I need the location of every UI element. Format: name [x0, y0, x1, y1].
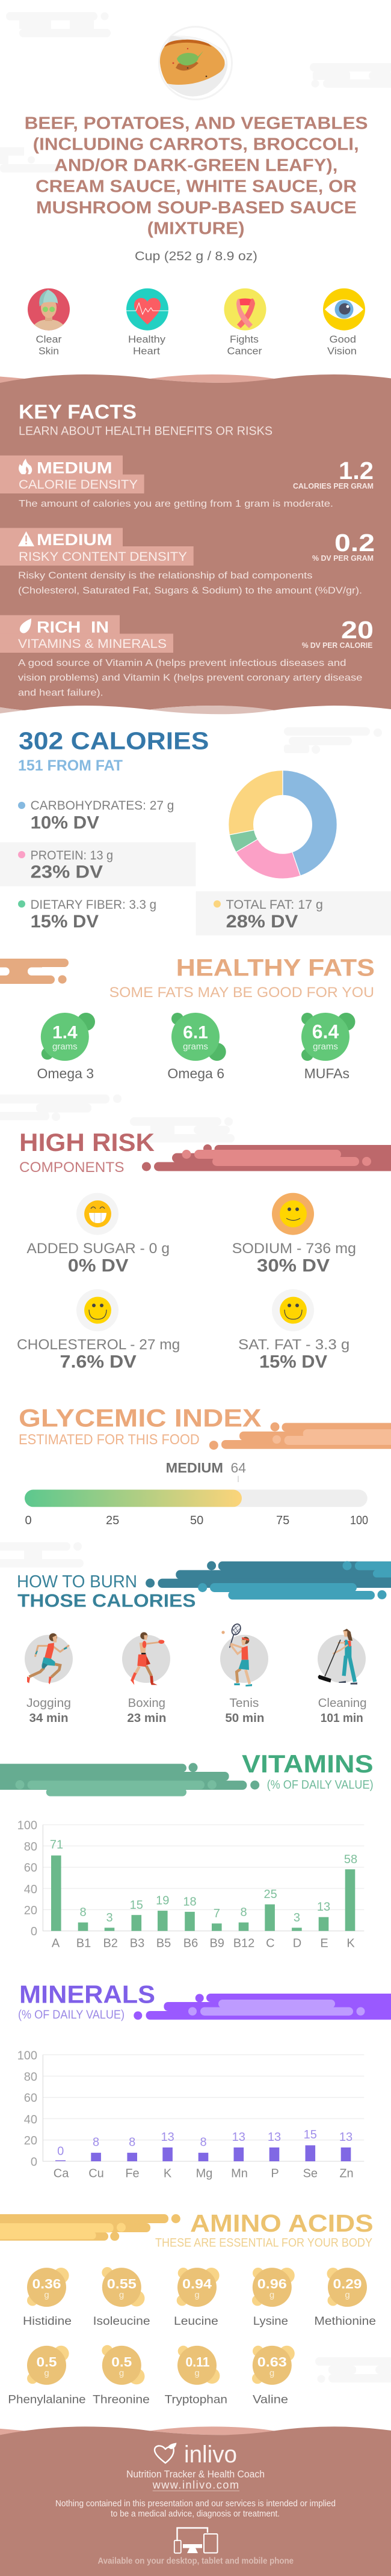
- glycemic scale: [25, 1514, 368, 1527]
- panel: amino acids: [0, 2209, 376, 2407]
- panel: vitamins: [0, 1750, 374, 1950]
- saturated fat: SAT. FAT - 3.3 g: [238, 1337, 349, 1353]
- amino acid grid: 0.5: [36, 2355, 57, 2369]
- key facts heading: KEY FACTS: [19, 400, 137, 423]
- title: AND/OR DARK-GREEN LEAFY),: [54, 156, 337, 175]
- risky content density row: (Cholesterol, Saturated Fat, Sugars & Sodium) to the amount (%DV/gr).: [18, 586, 362, 596]
- vitamins bar chart: B5: [156, 1937, 171, 1950]
- amino acid grid: Phenylalanine: [8, 2393, 86, 2407]
- panel: high risk components: [17, 1128, 391, 1372]
- amino acid grid: 0.96: [257, 2277, 287, 2292]
- minerals bar chart: K: [164, 2167, 172, 2180]
- minerals bar chart: Se: [303, 2167, 318, 2180]
- legend: dietary fiber: 15% DV: [31, 912, 99, 932]
- legend: carbohydrates: 10% DV: [31, 813, 99, 833]
- panel: footer: [0, 2426, 391, 2576]
- healthy fats subheading: SOME FATS MAY BE GOOD FOR YOU: [109, 984, 374, 1001]
- amino acid grid: Tryptophan: [165, 2393, 227, 2407]
- website: www.inlivo.com: [152, 2479, 239, 2491]
- exercise labels: 101 min: [321, 1712, 363, 1725]
- sodium: [232, 1193, 356, 1276]
- amino acid grid: 0.5: [111, 2355, 132, 2369]
- vitamins bar chart: B3: [130, 1937, 144, 1950]
- minerals bar chart: Ca: [54, 2167, 69, 2180]
- icon: good vision eye: [323, 288, 365, 331]
- title: CREAM SAUCE, WHITE SAUCE, OR: [35, 177, 357, 197]
- rich in vitamins and minerals row: 20: [341, 616, 374, 644]
- glycemic value: 64: [231, 1460, 246, 1476]
- sodium: 30% DV: [257, 1256, 330, 1276]
- minerals bar chart: 60: [24, 2092, 37, 2105]
- minerals bar chart: Fe: [125, 2167, 140, 2180]
- cholesterol: 7.6% DV: [60, 1352, 137, 1372]
- minerals bar chart: 0: [57, 2144, 64, 2158]
- vitamins bar chart: K: [346, 1937, 355, 1950]
- glycemic heading: GLYCEMIC INDEX: [19, 1403, 261, 1432]
- omega 3 badge: Omega 3: [37, 1066, 94, 1081]
- burn ribbon: [146, 1561, 391, 1599]
- icon: cleaning: [318, 1629, 366, 1685]
- mufas badge: 6.4: [312, 1021, 339, 1043]
- amino acid grid: Methionine: [314, 2315, 376, 2328]
- vitamins bar chart: B2: [103, 1937, 118, 1950]
- minerals bar chart: 15: [304, 2128, 317, 2141]
- icon: flame: [19, 459, 32, 474]
- title: BEEF, POTATOES, AND VEGETABLES: [25, 114, 368, 133]
- minerals bar chart: 40: [24, 2113, 37, 2126]
- vitamins bar chart: 100: [17, 1819, 37, 1832]
- vitamins bar chart: 3: [294, 1911, 300, 1924]
- amino acid grid: 0.55: [107, 2277, 137, 2292]
- amino acid grid: 0.63: [257, 2355, 287, 2369]
- amino acid grid: 0.29: [333, 2277, 362, 2292]
- amino acid grid: 0.11: [185, 2355, 209, 2369]
- minerals bar chart: 80: [24, 2071, 37, 2084]
- vitamins bar chart: D: [293, 1937, 301, 1950]
- exercise labels: [26, 1697, 367, 1725]
- minerals bar chart: 13: [339, 2131, 353, 2144]
- amino acid grid: g: [194, 2290, 200, 2300]
- legend: protein: 23% DV: [31, 862, 103, 882]
- calorie density row: CALORIES PER GRAM: [293, 482, 374, 490]
- vitamins bar chart: 7: [214, 1907, 220, 1920]
- disclaimer: Nothing contained in this presentation and our services is intended or implied: [55, 2499, 336, 2509]
- amino acid grid: [8, 2267, 376, 2407]
- glycemic value: [166, 1460, 246, 1482]
- vitamins bar chart: 40: [24, 1883, 37, 1896]
- rich in vitamins and minerals row: % DV PER CALORIE: [302, 641, 372, 650]
- icon: devices: [174, 2528, 218, 2553]
- panel: minerals: [17, 1980, 391, 2180]
- amino ribbon: [0, 2214, 180, 2241]
- minerals bar chart: 13: [268, 2131, 281, 2144]
- vitamins bar chart: C: [266, 1937, 275, 1950]
- disclaimer: to be a medical advice, diagnosis or treatment.: [111, 2509, 280, 2519]
- donut chart: [230, 771, 324, 876]
- amino acid grid: Threonine: [93, 2393, 150, 2407]
- amino acid grid: g: [345, 2290, 350, 2300]
- minerals bar chart: [17, 2049, 364, 2180]
- panel: glycemic index: [19, 1403, 391, 1527]
- risky content density row: RISKY CONTENT DENSITY: [19, 550, 187, 564]
- legend: carbohydrates: CARBOHYDRATES: 27 g: [31, 799, 174, 813]
- panel: how to burn those calories: THOSE CALORIES: [17, 1590, 196, 1611]
- minerals bar chart: Mn: [231, 2167, 248, 2180]
- vitamins heading: VITAMINS: [242, 1750, 374, 1778]
- minerals subheading: (% OF DAILY VALUE): [18, 2008, 125, 2021]
- glycemic scale: 50: [190, 1514, 203, 1527]
- glycemic scale: 25: [106, 1514, 119, 1527]
- rich in vitamins and minerals row: A good source of Vitamin A (helps prevent infectious diseases and: [18, 658, 346, 668]
- vitamins bar chart: B6: [183, 1937, 198, 1950]
- minerals bar chart: 100: [17, 2049, 37, 2062]
- vitamins bar chart: [17, 1819, 364, 1950]
- inlivo logo: inlivo: [184, 2441, 237, 2468]
- risky content density row: % DV PER GRAM: [312, 554, 374, 563]
- glycemic scale: 0: [25, 1514, 32, 1527]
- vitamins bar chart: 71: [50, 1838, 63, 1851]
- glycemic scale: 75: [276, 1514, 289, 1527]
- risky content density row: MEDIUM: [37, 531, 112, 549]
- amino acid grid: Isoleucine: [93, 2315, 150, 2328]
- legend: total fat: TOTAL FAT: 17 g: [226, 898, 323, 912]
- vitamins bar chart: 18: [183, 1896, 197, 1909]
- vitamins bar chart: B1: [76, 1937, 91, 1950]
- minerals bar chart: 8: [129, 2136, 135, 2149]
- vitamins bar chart: 20: [24, 1904, 37, 1917]
- amino acid grid: g: [119, 2290, 124, 2300]
- amino subheading: THESE ARE ESSENTIAL FOR YOUR BODY: [155, 2236, 372, 2250]
- minerals bar chart: 13: [232, 2131, 245, 2144]
- legend: total fat: 28% DV: [226, 912, 298, 932]
- calorie density row: [0, 456, 374, 509]
- cholesterol: CHOLESTEROL - 27 mg: [17, 1337, 180, 1353]
- exercise labels: 50 min: [225, 1712, 264, 1725]
- rich in vitamins and minerals row: and heart failure).: [18, 688, 103, 698]
- omega 6 badge: 6.1: [183, 1023, 208, 1043]
- minerals heading: MINERALS: [19, 1980, 155, 2009]
- omega 6 badge: [167, 1013, 226, 1081]
- vitamins ribbon: [0, 1763, 259, 1796]
- benefit icons row: [28, 288, 365, 357]
- calorie density row: CALORIE DENSITY: [19, 478, 138, 492]
- healthy fats heading: HEALTHY FATS: [176, 955, 375, 981]
- icon: warning triangle: [18, 531, 34, 546]
- burn heading: HOW TO BURN: [17, 1572, 137, 1592]
- availability note: Available on your desktop, tablet and mobile phone: [97, 2557, 294, 2566]
- icon: healthy heart: [126, 288, 168, 331]
- amino acid grid: 0.36: [32, 2277, 61, 2292]
- minerals bar chart: 8: [200, 2136, 207, 2149]
- cholesterol: [17, 1289, 180, 1372]
- food photo: soup bowl: [159, 26, 232, 100]
- omega 3 badge: 1.4: [52, 1023, 78, 1043]
- icon: fights cancer ribbon: [224, 288, 266, 331]
- glycemic scale: 100: [350, 1514, 368, 1527]
- amino acid grid: Leucine: [174, 2315, 218, 2328]
- sodium: SODIUM - 736 mg: [232, 1241, 356, 1257]
- vitamins bar chart: 19: [156, 1894, 169, 1908]
- calorie density row: MEDIUM: [37, 459, 112, 477]
- vitamins bar chart: 15: [130, 1899, 143, 1912]
- vitamins bar chart: 13: [317, 1900, 330, 1914]
- calorie density row: The amount of calories you are getting from 1 gram is moderate.: [19, 499, 333, 509]
- risky content density row: Risky Content density is the relationship of bad components: [18, 571, 313, 581]
- vitamins bar chart: 8: [240, 1906, 247, 1919]
- icon: clear skin: [28, 288, 70, 332]
- minerals bar chart: Cu: [88, 2167, 104, 2180]
- amino acid grid: g: [269, 2368, 274, 2378]
- rich in vitamins and minerals row: RICH IN: [37, 618, 109, 636]
- icon: tennis: [220, 1623, 268, 1686]
- saturated fat: 15% DV: [259, 1352, 327, 1372]
- vitamins bar chart: 80: [24, 1840, 37, 1854]
- mufas badge: grams: [313, 1042, 338, 1052]
- vitamins subheading: (% OF DAILY VALUE): [267, 1778, 374, 1792]
- benefit labels: Fights: [230, 334, 259, 345]
- added sugar: [26, 1193, 170, 1276]
- exercise labels: Boxing: [128, 1697, 165, 1710]
- minerals bar chart: Zn: [339, 2167, 354, 2180]
- legend: dietary fiber: DIETARY FIBER: 3.3 g: [31, 898, 156, 912]
- title: (MIXTURE): [147, 219, 245, 239]
- benefit labels: Heart: [133, 346, 160, 357]
- vitamins bar chart: E: [320, 1937, 328, 1950]
- benefit labels: Healthy: [128, 334, 166, 345]
- mufas badge: MUFAs: [304, 1066, 349, 1081]
- title: MUSHROOM SOUP-BASED SAUCE: [36, 198, 357, 218]
- inlivo logo: [155, 2441, 237, 2468]
- vitamins bar chart: 60: [24, 1861, 37, 1875]
- high risk heading: HIGH RISK: [19, 1128, 155, 1156]
- panel: key facts: [0, 374, 391, 714]
- risky content density row: [0, 528, 375, 596]
- tagline: Nutrition Tracker & Health Coach: [126, 2468, 265, 2480]
- title: (INCLUDING CARROTS, BROCCOLI,: [33, 135, 359, 154]
- high risk ribbon: [142, 1144, 391, 1171]
- amino acid grid: Valine: [253, 2393, 288, 2407]
- legend: protein: PROTEIN: 13 g: [31, 849, 113, 862]
- exercise labels: Jogging: [26, 1697, 71, 1710]
- exercise labels: Tenis: [229, 1697, 259, 1710]
- panel: calories: [0, 727, 391, 935]
- amino heading: AMINO ACIDS: [190, 2209, 374, 2237]
- vitamins bar chart: B12: [233, 1937, 254, 1950]
- risky content density row: 0.2: [334, 529, 375, 557]
- vitamins bar chart: 8: [79, 1906, 87, 1919]
- amino acid grid: g: [269, 2290, 274, 2300]
- omega 3 badge: grams: [52, 1042, 78, 1052]
- icon: boxing: [122, 1632, 170, 1685]
- added sugar: 0% DV: [68, 1256, 129, 1276]
- amino acid grid: 0.94: [182, 2277, 212, 2292]
- vitamins bar chart: B9: [209, 1937, 224, 1950]
- vitamins bar chart: 25: [263, 1888, 277, 1901]
- minerals bar chart: P: [271, 2167, 279, 2180]
- amino acid grid: g: [44, 2368, 49, 2378]
- benefit labels: Good: [330, 334, 356, 345]
- minerals bar chart: 13: [161, 2131, 174, 2144]
- healthy fats ribbon: [0, 959, 76, 984]
- omega 6 badge: Omega 6: [167, 1066, 224, 1081]
- amino acid grid: g: [194, 2368, 200, 2378]
- minerals bar chart: 0: [31, 2155, 37, 2169]
- amino acid grid: g: [119, 2368, 124, 2378]
- benefit labels: Clear: [36, 334, 62, 345]
- glycemic subheading: ESTIMATED FOR THIS FOOD: [19, 1432, 200, 1448]
- added sugar: ADDED SUGAR - 0 g: [26, 1241, 170, 1257]
- saturated fat: [238, 1289, 349, 1372]
- minerals bar chart: Mg: [196, 2167, 212, 2180]
- disclaimer: [55, 2499, 336, 2519]
- exercise labels: 34 min: [29, 1712, 69, 1725]
- minerals bar chart: 8: [93, 2136, 99, 2149]
- glycemic value: MEDIUM: [166, 1460, 223, 1476]
- legend: carbohydrates: [18, 799, 174, 833]
- title: [25, 114, 368, 239]
- exercise labels: Cleaning: [318, 1697, 367, 1710]
- glycemic bar: [25, 1489, 368, 1507]
- amino acid grid: Histidine: [23, 2315, 72, 2328]
- omega 6 badge: grams: [183, 1042, 208, 1052]
- high risk subheading: COMPONENTS: [19, 1159, 124, 1176]
- amino acid grid: Lysine: [253, 2315, 288, 2328]
- mufas badge: [301, 1013, 355, 1081]
- serving size: Cup (252 g / 8.9 oz): [135, 249, 257, 263]
- vitamins bar chart: A: [52, 1937, 60, 1950]
- benefit labels: [36, 334, 357, 357]
- vitamins bar chart: 3: [106, 1911, 113, 1924]
- calories from fat: 151 FROM FAT: [18, 757, 123, 774]
- panel: how to burn those calories: [17, 1561, 391, 1725]
- minerals bar chart: 20: [24, 2134, 37, 2147]
- minerals ribbon: [134, 1994, 391, 2019]
- amino acid grid: g: [44, 2290, 49, 2300]
- key facts subheading: LEARN ABOUT HEALTH BENEFITS OR RISKS: [19, 424, 272, 438]
- benefit labels: Skin: [38, 346, 59, 357]
- benefit labels: Cancer: [227, 346, 262, 357]
- calories heading: 302 CALORIES: [19, 727, 209, 754]
- rich in vitamins and minerals row: [0, 615, 374, 698]
- vitamins bar chart: 58: [344, 1853, 357, 1866]
- legend: protein: [18, 849, 113, 882]
- exercise labels: 23 min: [127, 1712, 166, 1725]
- omega 3 badge: [37, 1013, 95, 1081]
- panel: healthy fats: [0, 955, 375, 1081]
- legend: total fat: [214, 898, 323, 932]
- benefit labels: Vision: [327, 346, 357, 357]
- vitamins bar chart: 0: [31, 1925, 37, 1938]
- calorie density row: 1.2: [339, 457, 374, 484]
- icon: leaf: [20, 618, 31, 633]
- rich in vitamins and minerals row: VITAMINS & MINERALS: [18, 637, 167, 651]
- rich in vitamins and minerals row: vision problems) and Vitamin K (helps prevent coronary artery disease: [18, 673, 363, 683]
- glycemic ribbon: [209, 1422, 391, 1450]
- legend: dietary fiber: [18, 898, 156, 932]
- icon: jogging: [25, 1633, 73, 1684]
